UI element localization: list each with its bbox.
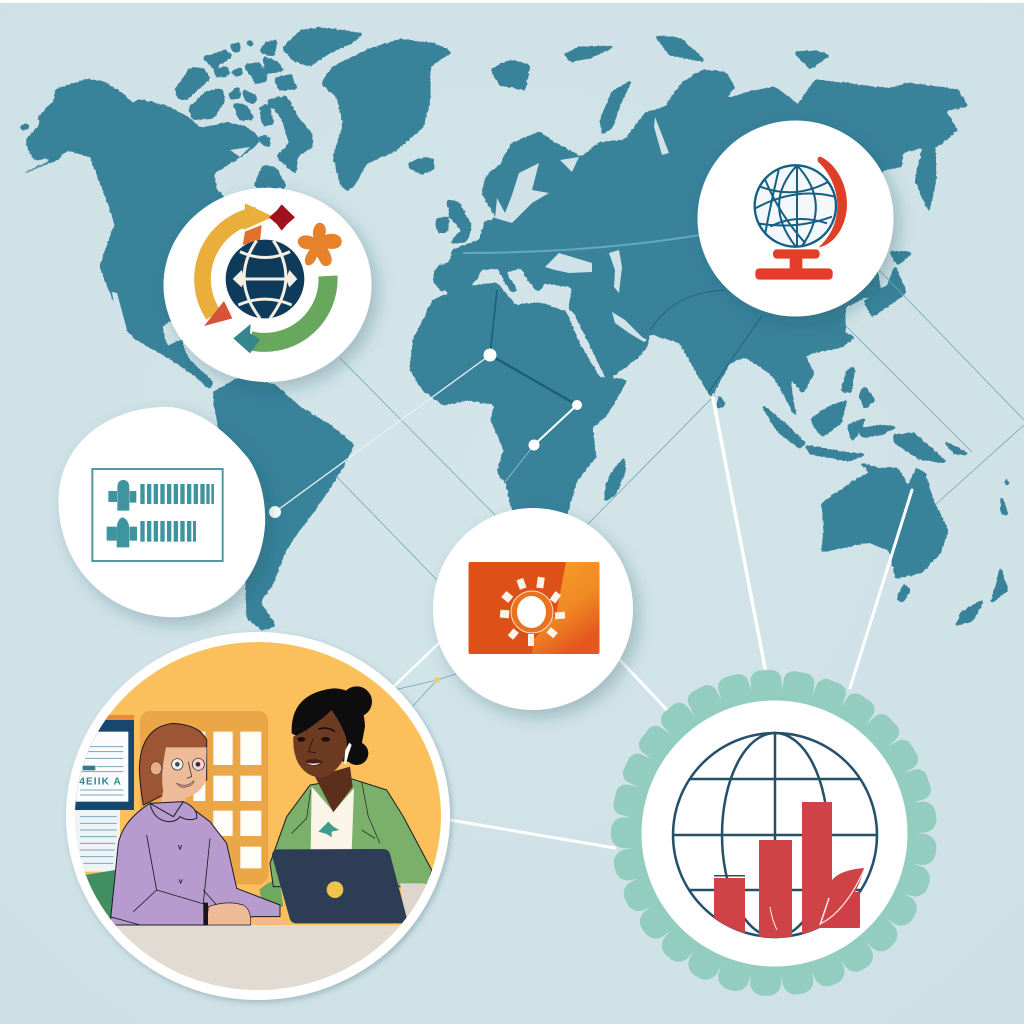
green plant [259, 881, 283, 907]
icon: data table [92, 469, 223, 561]
map: arctic russian islands [490, 36, 830, 135]
bar chart [714, 802, 864, 940]
panel: cycle globe badge [164, 188, 372, 382]
map: madagascar [604, 457, 625, 502]
panel: flower badge with globe chart [602, 662, 946, 1005]
panel: two people at laptop [60, 630, 460, 1012]
thin route lines [335, 270, 1024, 707]
icon: orange card with sun [468, 562, 600, 654]
top edge strip [0, 0, 1024, 3]
map: eurasia [433, 70, 968, 420]
small yellow node [434, 677, 440, 683]
panel: data table badge [59, 407, 265, 617]
poster text: 4EIIK A [79, 777, 121, 788]
icon: wireframe globe [673, 733, 877, 937]
map: australia [822, 468, 948, 578]
light blue route across eurasia [463, 235, 700, 253]
inland seas [112, 117, 669, 342]
person: woman in lilac [110, 723, 292, 925]
panel: orange card badge [433, 508, 633, 710]
scalloped ring [602, 662, 946, 1005]
wall window panel [140, 711, 268, 884]
icon: bars row one [108, 480, 214, 511]
network nodes [269, 348, 582, 518]
map: north america and arctic [10, 27, 472, 388]
white connector lines [275, 355, 912, 848]
laptop [272, 849, 407, 923]
world map [10, 27, 1010, 630]
icon: cycle globe [203, 203, 342, 353]
dark route lines [490, 290, 762, 405]
leaf veins [770, 870, 864, 930]
panel: desktop globe badge [698, 120, 894, 316]
person: woman with green cardigan [270, 686, 437, 927]
map: africa [410, 283, 627, 540]
map: south america [213, 377, 354, 630]
icon: bars row two [107, 517, 196, 547]
icon: desktop globe [755, 157, 847, 280]
map: asia pacific islands [717, 252, 1010, 626]
green chair [85, 870, 115, 925]
wall poster [75, 715, 134, 872]
table [116, 925, 400, 990]
